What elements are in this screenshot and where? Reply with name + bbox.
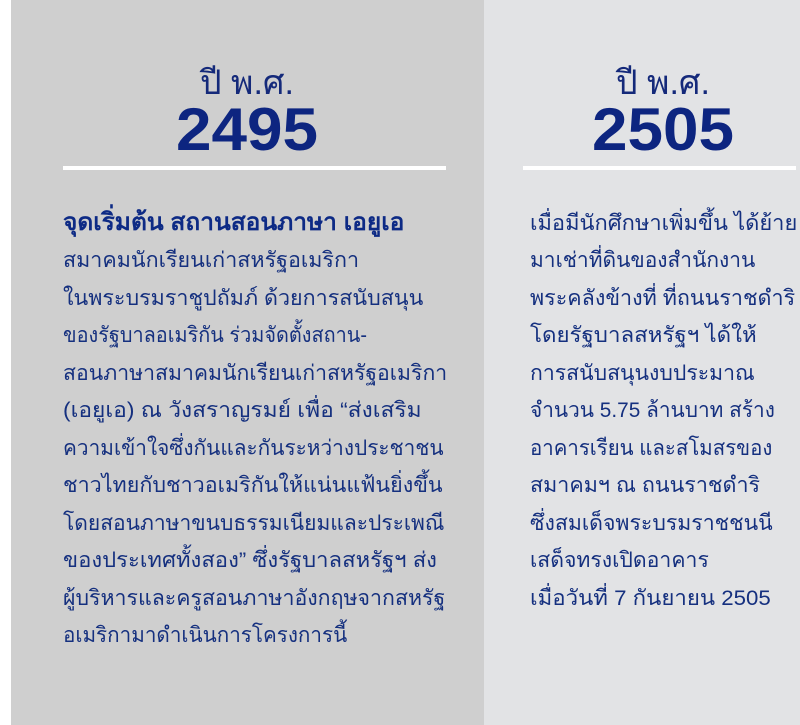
text block: right body: ซึ่งสมเด็จพระบรมราชชนนี: [530, 511, 773, 535]
heading: year 2505: 2505: [592, 96, 734, 163]
rule right: [523, 166, 796, 170]
text block: right body: เมื่อมีนักศึกษาเพิ่มขึ้น ได้ย้าย: [530, 211, 797, 235]
text block: right body: จำนวน 5.75 ล้านบาท สร้าง: [530, 398, 775, 422]
text block: right body: พระคลังข้างที่ ที่ถนนราชดำริ: [530, 286, 795, 310]
text block: left body: ของประเทศทั้งสอง” ซึ่งรัฐบาลสหรัฐฯ ส่ง: [63, 548, 437, 572]
text block: right body: เมื่อวันที่ 7 กันยายน 2505: [530, 586, 771, 610]
text block: left body: ผู้บริหารและครูสอนภาษาอังกฤษจากสหรัฐ: [63, 586, 445, 610]
heading: year 2495: 2495: [176, 96, 318, 163]
text block: left body: (เอยูเอ) ณ วังสราญรมย์ เพื่อ “ส่งเสริม: [63, 398, 422, 422]
text block: right body: การสนับสนุนงบประมาณ: [530, 361, 755, 385]
text block: left body: [63, 204, 447, 647]
text block: right body: สมาคมฯ ณ ถนนราชดำริ: [530, 473, 760, 497]
text block: right body: [530, 207, 797, 610]
text block: left body: ชาวไทยกับชาวอเมริกันให้แน่นแฟ้นยิ่งขึ้น: [63, 473, 443, 497]
text block: left body: อเมริกามาดำเนินการโครงการนี้: [63, 623, 347, 647]
heading: year label right: ปี พ.ศ.: [616, 64, 710, 102]
text block: left body: จุดเริ่มต้น สถานสอนภาษา เอยูเอ: [63, 209, 404, 236]
text block: left body: ของรัฐบาลอเมริกัน ร่วมจัดตั้งสถาน-: [63, 323, 367, 347]
rule left: [63, 166, 446, 170]
text block: left body: ในพระบรมราชูปถัมภ์ ด้วยการสนับสนุน: [63, 286, 423, 310]
panel: right 2505: [484, 0, 800, 725]
text block: right body: อาคารเรียน และสโมสรของ: [530, 436, 772, 460]
text block: left body: ความเข้าใจซึ่งกันและกันระหว่างประชาชน: [63, 436, 444, 460]
panel: left 2495: [11, 0, 484, 725]
text block: right body: เสด็จทรงเปิดอาคาร: [530, 548, 709, 572]
text block: right body: มาเช่าที่ดินของสำนักงาน: [530, 248, 755, 272]
text block: left body: สมาคมนักเรียนเก่าสหรัฐอเมริกา: [63, 248, 359, 272]
heading: year label left: ปี พ.ศ.: [200, 64, 294, 102]
text block: left body: โดยสอนภาษาขนบธรรมเนียมและประเพณี: [63, 511, 444, 535]
text block: right body: โดยรัฐบาลสหรัฐฯ ได้ให้: [530, 323, 757, 347]
text block: left body: สอนภาษาสมาคมนักเรียนเก่าสหรัฐอเมริกา: [63, 361, 447, 385]
